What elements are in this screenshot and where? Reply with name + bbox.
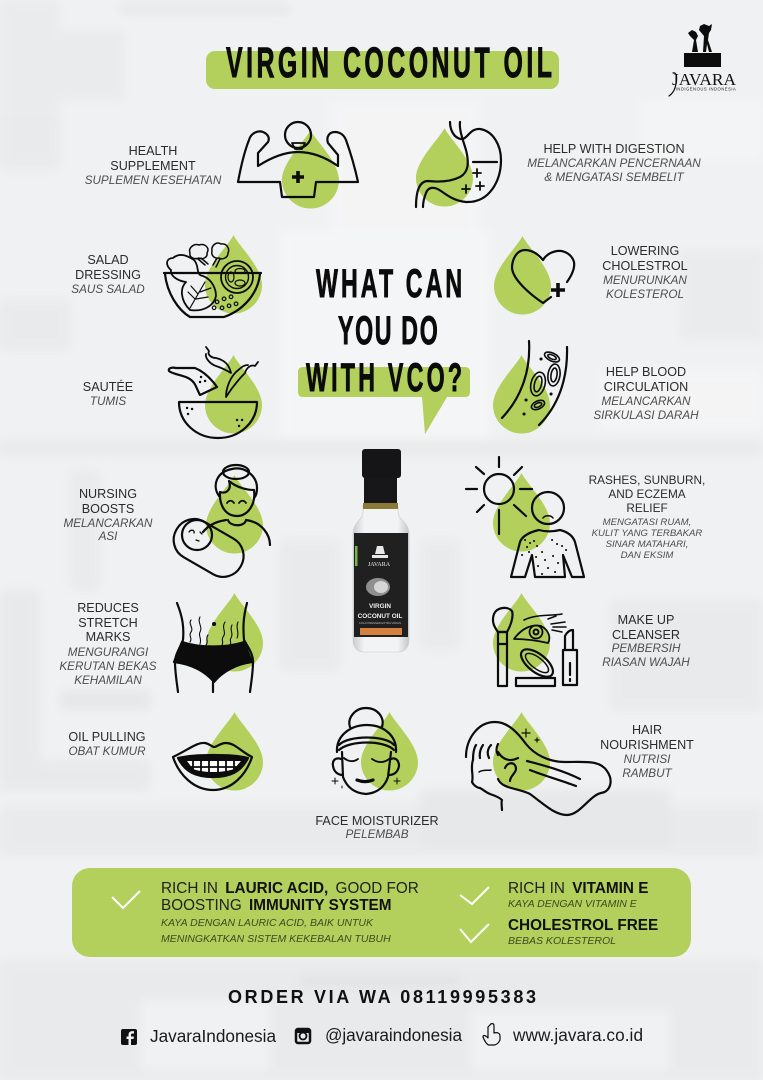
item: stretch marks: KERUTAN BEKAS xyxy=(59,660,157,673)
item: rashes and sunburn: RASHES, SUNBURN, xyxy=(589,473,705,487)
icon: flexing arms xyxy=(238,122,358,197)
item: rashes and sunburn: KULIT YANG TERBAKAR xyxy=(592,528,702,539)
item: digestion: MELANCARKAN PENCERNAAN xyxy=(527,157,701,170)
heading: what can you do with VCO: WHAT CAN xyxy=(316,260,462,306)
item: oil pulling xyxy=(68,712,263,790)
logo: Javara: JAVARA xyxy=(672,70,737,89)
item: lowering cholesterol: MENURUNKAN xyxy=(603,274,687,287)
item: makeup cleanser xyxy=(493,593,690,686)
item: blood circulation: MELANCARKAN xyxy=(602,395,691,408)
footer: social links: @javaraindonesia xyxy=(325,1025,462,1045)
item: rashes and sunburn: MENGATASI RUAM, xyxy=(603,517,691,528)
icon: sun and sunburnt back xyxy=(466,457,584,577)
item: stretch marks: MENGURANGI xyxy=(68,646,149,659)
footer: social links: JavaraIndonesia xyxy=(150,1026,276,1046)
item: blood circulation xyxy=(493,341,699,434)
item: sautee xyxy=(83,347,262,438)
item: makeup cleanser: RIASAN WAJAH xyxy=(602,656,690,669)
speech bubble xyxy=(298,367,470,434)
icon: check vitamin e xyxy=(460,887,489,904)
icon: pointing hand xyxy=(483,1024,500,1045)
item: rashes and sunburn: AND ECZEMA xyxy=(608,487,686,501)
item: blood circulation: HELP BLOOD xyxy=(606,365,686,379)
product: coconut oil bottle: JAVARA xyxy=(368,562,391,568)
item: stretch marks: KEHAMILAN xyxy=(74,674,142,687)
item: rashes and sunburn: RELIEF xyxy=(626,501,668,515)
order line: ORDER VIA WA 08119995383 xyxy=(228,987,536,1007)
item: health supplement: SUPLEMEN KESEHATAN xyxy=(85,174,222,187)
item: face moisturizer: FACE MOISTURIZER xyxy=(315,814,439,828)
product: coconut oil bottle: VIRGIN xyxy=(369,603,391,610)
item: lowering cholesterol: LOWERING xyxy=(611,244,679,258)
text: lauric acid: RICH IN LAURIC ACID, GOOD FOR xyxy=(161,880,419,897)
item: health supplement xyxy=(85,122,358,208)
icon: pan and chili xyxy=(169,347,258,438)
text: lauric acid xyxy=(161,880,419,945)
item: salad dressing: SALAD xyxy=(87,253,129,267)
item: stretch marks: STRETCH xyxy=(78,616,138,630)
item: oil pulling: OBAT KUMUR xyxy=(68,745,146,758)
item: sautee: TUMIS xyxy=(90,395,126,408)
icon: flowing hair xyxy=(466,722,611,815)
heading: what can you do with VCO: WITH VCO? xyxy=(306,354,462,400)
item: sautee: SAUTÉE xyxy=(83,379,133,394)
item: digestion: HELP WITH DIGESTION xyxy=(543,142,685,156)
text: vitamin e: RICH IN VITAMIN E xyxy=(508,880,648,897)
item: salad dressing: SAUS SALAD xyxy=(71,283,145,296)
item: rashes and sunburn: SINAR MATAHARI, xyxy=(606,539,688,550)
item: lowering cholesterol: KOLESTEROL xyxy=(606,288,684,301)
item: salad dressing: DRESSING xyxy=(75,268,141,282)
logo: Javara: INDIGENOUS INDONESIA xyxy=(676,86,736,92)
item: health supplement: SUPPLEMENT xyxy=(110,159,196,173)
item: digestion xyxy=(416,122,701,207)
text: lauric acid: MENINGKATKAN SISTEM KEKEBALAN TUBUH xyxy=(161,933,391,945)
product: coconut oil bottle xyxy=(353,449,409,652)
text: vitamin e xyxy=(508,880,648,910)
item: salad dressing xyxy=(71,235,262,317)
icon: belly and underwear xyxy=(174,603,253,692)
item: nursing boosts: BOOSTS xyxy=(82,502,134,516)
heading: what can you do with VCO: YOU DO xyxy=(338,307,438,353)
icon: mother and baby xyxy=(166,465,270,584)
footer: social links: www.javara.co.id xyxy=(512,1025,643,1045)
item: oil pulling: OIL PULLING xyxy=(68,730,146,744)
icon: blood vessel xyxy=(502,341,567,425)
icon: check cholesterol free xyxy=(460,924,489,942)
icon: salad bowl xyxy=(164,243,261,317)
text: lauric acid: BOOSTING IMMUNITY SYSTEM xyxy=(161,897,392,914)
product: coconut oil bottle: COLD PRESSED EXTRA VIRGIN xyxy=(359,621,401,625)
item: digestion: & MENGATASI SEMBELIT xyxy=(544,171,684,184)
text: cholesterol free: BEBAS KOLESTEROL xyxy=(508,935,616,947)
item: hair nourishment: NUTRISI xyxy=(624,753,671,766)
item: blood circulation: CIRCULATION xyxy=(604,380,688,394)
heading: what can you do with VCO xyxy=(298,260,470,434)
icon: stomach xyxy=(416,122,501,207)
icon: facebook xyxy=(121,1029,137,1045)
icon: check lauric acid xyxy=(112,891,140,908)
text: vitamin e: KAYA DENGAN VITAMIN E xyxy=(508,898,638,910)
text: cholesterol free: CHOLESTROL FREE xyxy=(508,917,658,934)
text: lauric acid: KAYA DENGAN LAURIC ACID, BAIK UNTUK xyxy=(161,917,374,929)
product: coconut oil bottle: COCONUT OIL xyxy=(358,613,402,620)
item: makeup cleanser: CLEANSER xyxy=(612,628,680,642)
icon: heart xyxy=(512,250,574,303)
item: lowering cholesterol xyxy=(494,236,688,314)
icon: makeup set xyxy=(493,608,577,686)
text: cholesterol free xyxy=(508,917,658,947)
item: nursing boosts: ASI xyxy=(98,530,118,543)
item: nursing boosts: NURSING xyxy=(79,487,137,501)
item: nursing boosts: MELANCARKAN xyxy=(64,517,153,530)
title banner: VIRGIN COCONUT OIL xyxy=(226,39,552,87)
item: rashes and sunburn: DAN EKSIM xyxy=(621,550,673,561)
item: health supplement: HEALTH xyxy=(129,144,177,158)
item: stretch marks: MARKS xyxy=(86,630,130,644)
item: face moisturizer: PELEMBAB xyxy=(345,828,409,841)
item: makeup cleanser: MAKE UP xyxy=(618,613,674,627)
item: nursing boosts xyxy=(64,465,270,584)
logo: Javara xyxy=(669,24,737,96)
icon: instagram xyxy=(296,1029,310,1043)
item: face moisturizer xyxy=(315,708,439,841)
item: blood circulation: SIRKULASI DARAH xyxy=(593,409,699,422)
icon: woman's face xyxy=(332,708,400,794)
item: hair nourishment: HAIR xyxy=(632,723,662,737)
item: hair nourishment: RAMBUT xyxy=(622,767,673,780)
footer: social links xyxy=(121,1024,643,1046)
item: hair nourishment xyxy=(466,712,694,815)
item: rashes and sunburn xyxy=(466,457,705,577)
item: stretch marks: REDUCES xyxy=(77,601,139,615)
item: hair nourishment: NOURISHMENT xyxy=(600,738,694,752)
item: makeup cleanser: PEMBERSIH xyxy=(612,642,681,655)
panel: benefits xyxy=(72,868,691,957)
icon: lips and teeth xyxy=(173,743,252,790)
item: stretch marks xyxy=(59,593,263,692)
item: lowering cholesterol: CHOLESTROL xyxy=(602,259,688,273)
